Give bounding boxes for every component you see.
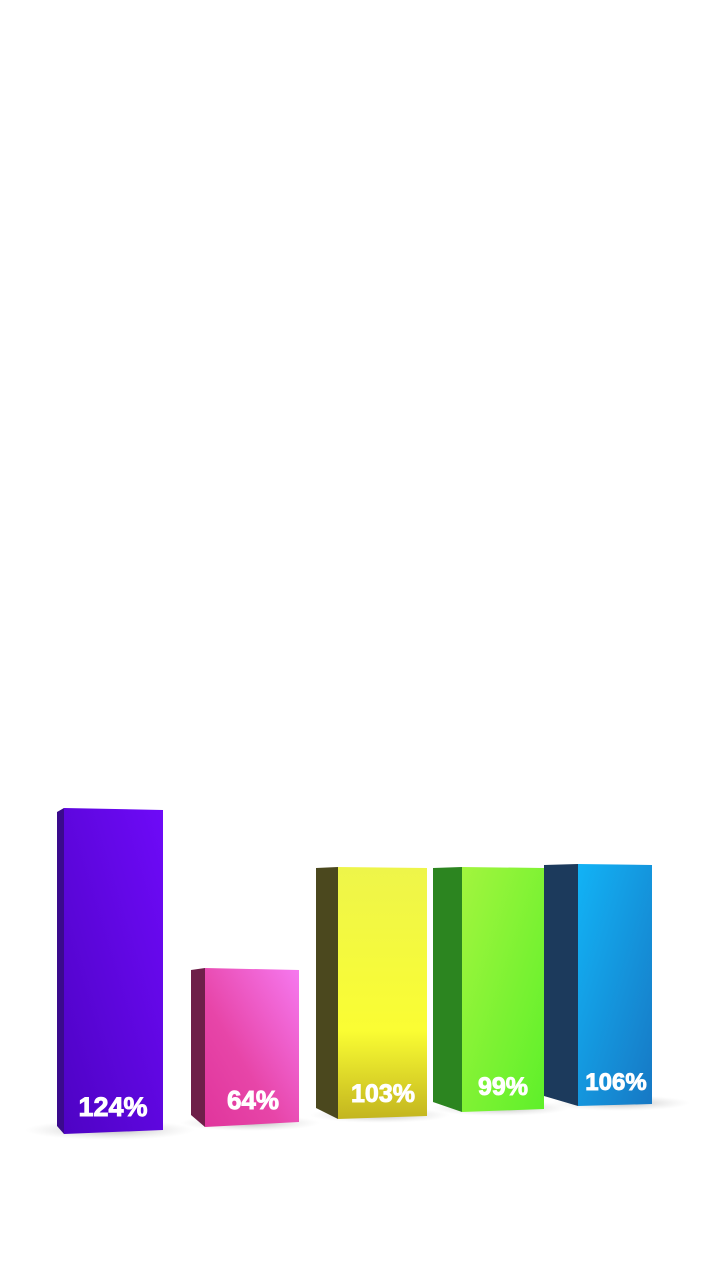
bar: 64%	[191, 968, 299, 1127]
bar: 106%	[544, 864, 652, 1106]
bar: 124%: 124%	[78, 1092, 148, 1122]
bar: 106%: 106%	[585, 1069, 647, 1096]
floor shadows	[25, 1095, 690, 1140]
bar: 99%: 99%	[478, 1073, 528, 1101]
bar: 103%: 103%	[351, 1080, 415, 1108]
bar: 124%	[57, 808, 163, 1134]
bar: 103%	[316, 867, 427, 1119]
bar: 99%	[433, 867, 544, 1112]
bar: 64%: 64%	[227, 1085, 279, 1115]
